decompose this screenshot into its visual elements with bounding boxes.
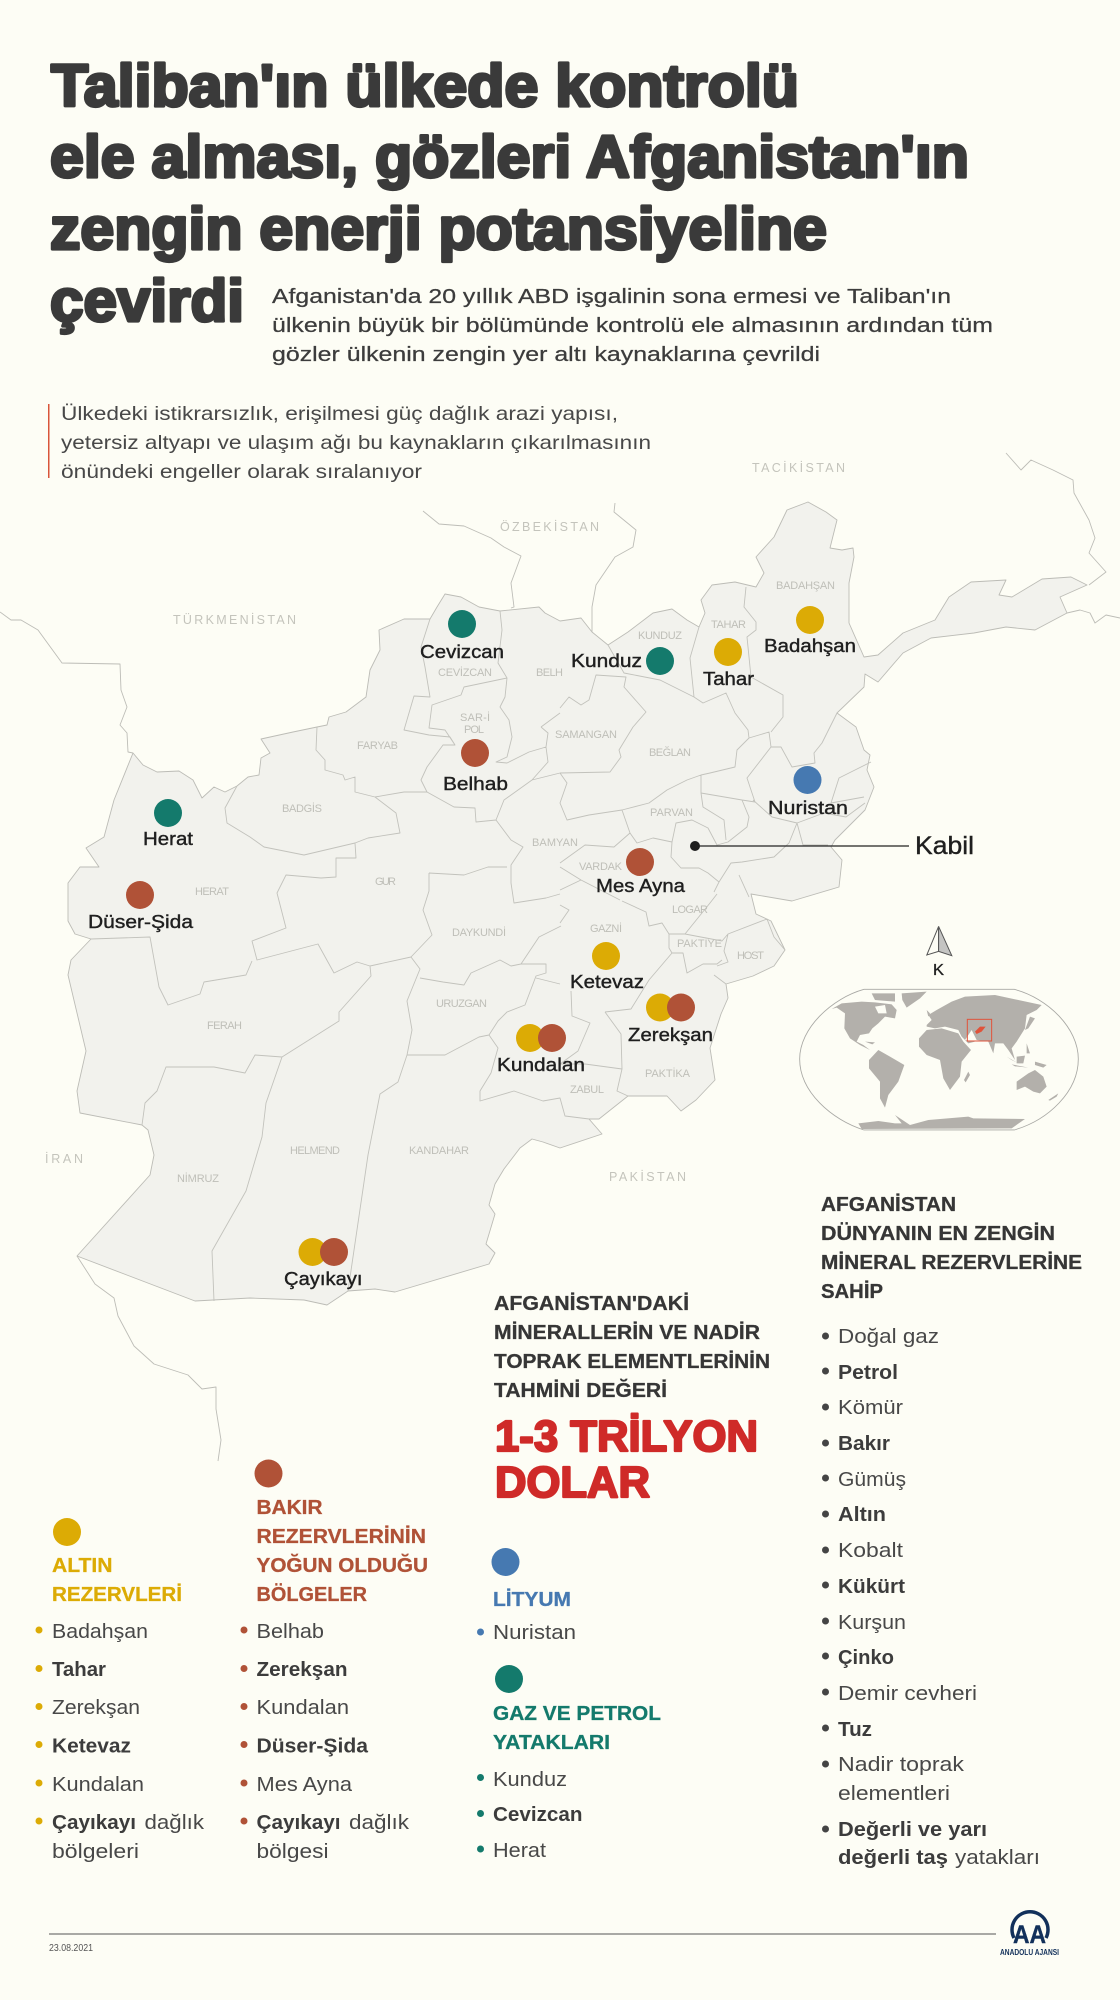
list items: Demir cevheri (838, 1682, 977, 1705)
heading: MİNERAL REZERVLERİNE (821, 1251, 1082, 1274)
map marker: Belhab: Belhab (443, 773, 508, 794)
province labels: FERAH (207, 1020, 242, 1032)
callout: obstacles paragraph: Ülkedeki istikrarsızlık, erişilmesi güç dağlık arazi yapısı, (61, 403, 618, 425)
panel: estimated value (494, 1292, 770, 1507)
list: gas and oil regions: Kunduz (493, 1768, 567, 1791)
list: gold regions: Kundalan (52, 1773, 144, 1796)
province labels: PAKTİKA (645, 1067, 691, 1080)
map marker: Cevizcan: Cevizcan (420, 641, 504, 662)
province labels (177, 580, 835, 1185)
map marker: Cevizcan (420, 610, 504, 662)
heading: copper reserves (256, 1496, 428, 1606)
list: lithium regions: Nuristan (493, 1621, 576, 1644)
heading: gold reserves (52, 1554, 182, 1606)
subtitle text block: gözler ülkenin zengin yer altı kaynaklarına çevrildi (272, 343, 820, 366)
list: gold regions: Tahar (52, 1658, 106, 1681)
map marker: Çayıkayı: Çayıkayı (284, 1268, 362, 1289)
list items: Kurşun (838, 1611, 906, 1634)
neighbouring country labels: PAKİSTAN (609, 1170, 686, 1184)
icon: copper dot (254, 1460, 282, 1488)
list: copper regions: bölgesi (256, 1840, 328, 1863)
list items: elementleri (838, 1782, 950, 1805)
panel: estimated value: TAHMİNİ DEĞERİ (494, 1378, 667, 1402)
list: copper regions: Çayıkayı (256, 1811, 340, 1834)
heading: gas and oil: GAZ VE PETROL (493, 1702, 661, 1725)
callout: Kabil (690, 832, 974, 860)
province labels: PARVAN (650, 807, 693, 819)
map marker: Herat: Herat (143, 828, 193, 849)
neighbouring country labels (45, 461, 845, 1184)
logo: Anadolu Ajansı (1000, 1912, 1059, 1957)
neighbouring country labels: ÖZBEKİSTAN (500, 520, 599, 534)
heading: copper reserves: REZERVLERİNİN (256, 1525, 426, 1548)
logo: Anadolu Ajansı: ANADOLU AJANSI (1000, 1947, 1059, 1957)
list items: Kobalt (838, 1539, 903, 1562)
list: gold regions: bölgeleri (52, 1840, 139, 1863)
province labels: PAKTİYE (677, 937, 722, 950)
map marker: Kunduz (571, 647, 674, 675)
panel: estimated value: TOPRAK ELEMENTLERİNİN (494, 1350, 770, 1373)
province labels: LOGAR (672, 904, 708, 916)
province labels: KANDAHAR (409, 1145, 469, 1157)
panel: lithium legend (477, 1548, 576, 1644)
panel: gas and oil legend (477, 1665, 661, 1862)
list items: Çinko (838, 1646, 894, 1669)
map marker: Badahşan (764, 606, 856, 656)
heading: gold reserves: REZERVLERİ (52, 1583, 182, 1606)
title: ele alması, gözleri Afganistan'ın (50, 124, 969, 190)
subtitle text block: Afganistan'da 20 yıllık ABD işgalinin sona ermesi ve Taliban'ın (272, 285, 951, 308)
list items: yatakları (955, 1846, 1040, 1869)
heading: DÜNYANIN EN ZENGİN (821, 1222, 1055, 1245)
list: gold regions: dağlık (144, 1811, 205, 1834)
heading: SAHİP (821, 1280, 883, 1303)
heading: gas and oil: YATAKLARI (493, 1731, 610, 1754)
list items: Tuz (838, 1718, 872, 1741)
neighbouring borders (0, 453, 1120, 1461)
map marker: Zerekşan: Zerekşan (628, 1024, 713, 1045)
province labels: SAMANGAN (555, 729, 617, 741)
map marker: Ketevaz: Ketevaz (570, 971, 644, 992)
list: copper regions: Kundalan (256, 1696, 349, 1719)
list: copper regions: Düser-Şida (256, 1734, 369, 1758)
province labels: BADAHŞAN (776, 580, 835, 592)
province labels: GUR (375, 876, 396, 888)
panel: mineral reserves list (821, 1193, 1082, 1869)
logo: Anadolu Ajansı: AA (1013, 1921, 1046, 1949)
panel: estimated value: 1-3 TRİLYON (495, 1412, 758, 1461)
province labels: NİMRUZ (177, 1172, 219, 1185)
province labels: ZABUL (570, 1084, 604, 1096)
list items: Doğal gaz (838, 1325, 939, 1348)
map marker: Nuristan (768, 766, 848, 818)
heading: gold reserves: ALTIN (52, 1554, 112, 1577)
list items: değerli taş (838, 1846, 948, 1869)
province labels: BADGİS (282, 802, 322, 815)
province labels: KUNDUZ (638, 630, 682, 642)
panel: estimated value: MİNERALLERİN VE NADİR (494, 1321, 760, 1344)
neighbouring country labels: TACİKİSTAN (752, 461, 845, 475)
title: zengin enerji potansiyeline (50, 196, 827, 262)
icon: lithium dot (492, 1548, 520, 1576)
map marker: Kundalan: Kundalan (497, 1054, 585, 1075)
list: copper regions: dağlık (349, 1811, 410, 1834)
map marker: Ketevaz (570, 942, 644, 992)
list: copper regions: Zerekşan (256, 1658, 348, 1681)
province labels: SAR-İ (460, 711, 490, 724)
map marker: Herat (143, 799, 193, 849)
title: çevirdi (50, 268, 244, 334)
map marker: Tahar (703, 638, 754, 689)
heading: gas and oil (493, 1702, 661, 1754)
list items: Altın (838, 1503, 886, 1526)
list items: Değerli ve yarı (838, 1818, 987, 1841)
province labels: BELH (536, 667, 563, 679)
list items: Gümüş (838, 1468, 906, 1491)
province labels: TAHAR (711, 619, 746, 631)
heading: copper reserves: YOĞUN OLDUĞU (256, 1553, 428, 1577)
map marker: Kunduz: Kunduz (571, 650, 642, 671)
map marker: Çayıkayı (284, 1238, 362, 1289)
panel: copper reserves legend (240, 1460, 428, 1863)
list: gas and oil regions (477, 1768, 582, 1862)
neighbouring country labels: İRAN (45, 1152, 83, 1166)
map marker: Nuristan: Nuristan (768, 797, 848, 818)
callout: obstacles paragraph (48, 403, 651, 483)
map marker: Tahar: Tahar (703, 668, 754, 689)
callout: obstacles paragraph: önündeki engeller olarak sıralanıyor (61, 461, 423, 483)
list: gold regions: Zerekşan (52, 1696, 140, 1719)
list items: Bakır (838, 1432, 890, 1455)
list items (822, 1325, 1040, 1869)
list items: Kömür (838, 1396, 903, 1419)
icon: north arrow: K (933, 962, 945, 979)
heading: copper reserves: BAKIR (256, 1496, 323, 1519)
list: gold regions: Çayıkayı (52, 1811, 136, 1834)
title (50, 53, 969, 334)
title: Taliban'ın ülkede kontrolü (51, 53, 799, 119)
province labels: HELMEND (290, 1145, 340, 1157)
list: gold regions: Badahşan (52, 1620, 148, 1643)
map marker: Düser-Şida: Düser-Şida (88, 911, 194, 932)
panel: gold reserves legend (36, 1518, 205, 1863)
province borders (91, 587, 871, 1301)
callout: Kabil: Kabil (915, 832, 974, 860)
map marker: Düser-Şida (88, 881, 194, 932)
country silhouette (68, 502, 1087, 1305)
heading: copper reserves: BÖLGELER (256, 1583, 367, 1606)
footer rule and date: 23.08.2021 (49, 1943, 93, 1954)
map of Afghanistan (0, 453, 1120, 1461)
list: gold regions (36, 1620, 205, 1863)
map marker: Mes Ayna (596, 848, 686, 896)
province labels: DAYKUNDİ (452, 926, 506, 939)
list items: Nadir toprak (838, 1753, 965, 1776)
province labels: HOST (737, 950, 764, 962)
map marker: Zerekşan (628, 994, 713, 1045)
neighbouring country labels: TÜRKMENİSTAN (173, 613, 296, 627)
heading: AFGANİSTAN (821, 1193, 956, 1216)
list: copper regions: Belhab (256, 1620, 324, 1643)
subtitle text block (272, 285, 993, 366)
map marker: Badahşan: Badahşan (764, 635, 856, 656)
list: copper regions (240, 1620, 410, 1863)
heading: lithium: LİTYUM (493, 1588, 571, 1611)
list: gas and oil regions: Cevizcan (493, 1803, 582, 1826)
province labels: FARYAB (357, 740, 398, 752)
list items: Kükürt (838, 1575, 905, 1598)
panel: estimated value: AFGANİSTAN'DAKİ (494, 1292, 689, 1315)
province labels: CEVİZCAN (438, 666, 492, 679)
locator world map (800, 989, 1078, 1130)
icon: north arrow (927, 926, 952, 979)
province labels: VARDAK (579, 861, 623, 873)
list: gold regions: Ketevaz (52, 1734, 131, 1758)
province labels: BEĞLAN (649, 746, 691, 759)
callout: obstacles paragraph: yetersiz altyapı ve ulaşım ağı bu kaynakların çıkarılmasının (61, 432, 651, 454)
panel: estimated value: DOLAR (495, 1458, 650, 1507)
list items: Petrol (838, 1361, 898, 1384)
subtitle text block: ülkenin büyük bir bölümünde kontrolü ele almasının ardından tüm (272, 314, 993, 337)
province labels: GAZNİ (590, 922, 622, 935)
icon: gold dot (53, 1518, 81, 1546)
map marker: Belhab (443, 739, 508, 794)
province labels: BAMYAN (532, 837, 578, 849)
icon: gas and oil dot (495, 1665, 523, 1693)
list: gas and oil regions: Herat (493, 1839, 546, 1862)
map marker: Mes Ayna: Mes Ayna (596, 875, 686, 896)
list: copper regions: Mes Ayna (256, 1773, 353, 1796)
province labels: POL (464, 724, 484, 736)
province labels: HERAT (195, 886, 229, 898)
map marker: Kundalan (497, 1024, 585, 1075)
province labels: URUZGAN (436, 998, 487, 1010)
heading (821, 1193, 1082, 1303)
